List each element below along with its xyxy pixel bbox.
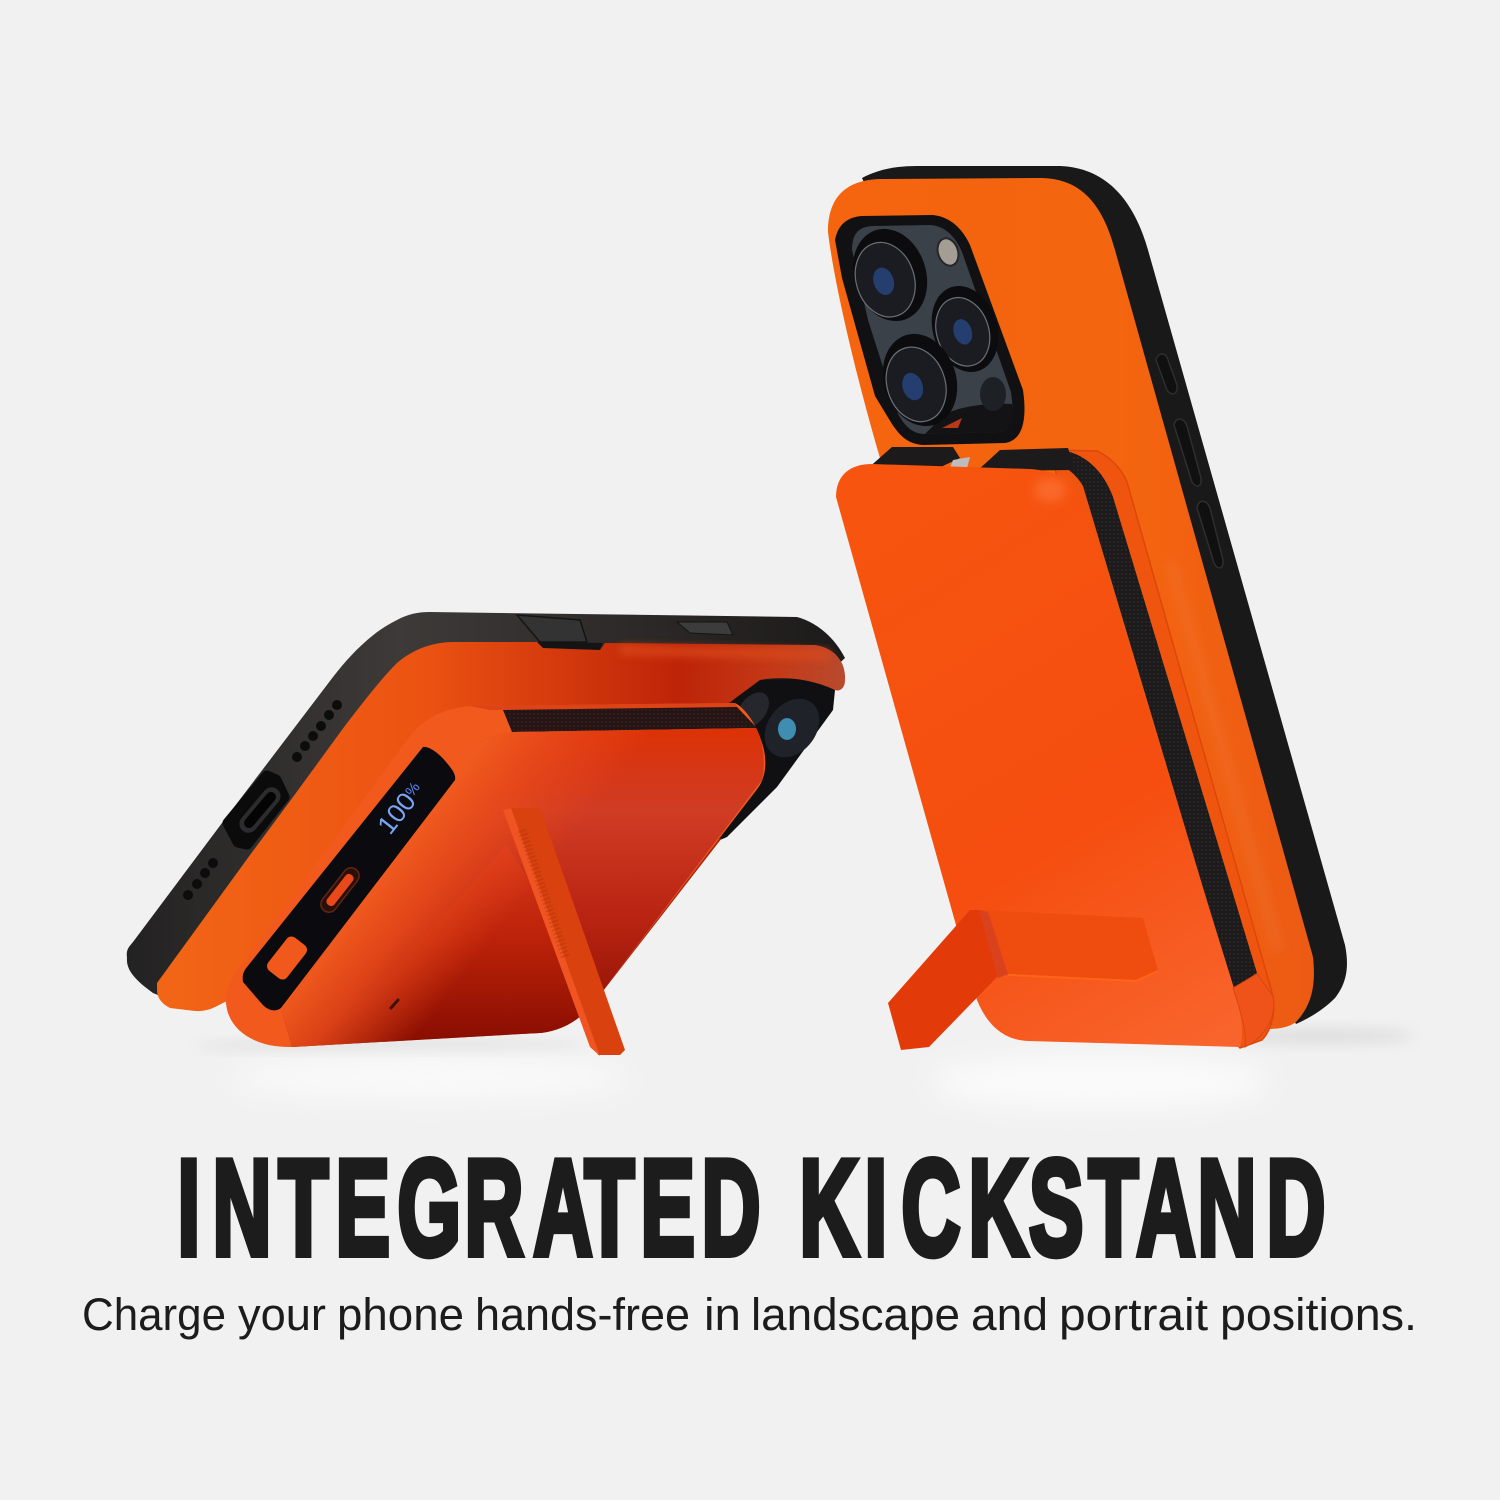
recess ledge — [1008, 971, 1158, 981]
title: INTEGRATED — [177, 1131, 760, 1284]
battery percentage readout: 100 — [371, 787, 422, 840]
subtitle: landscape — [751, 1289, 960, 1340]
side glow — [282, 728, 764, 1047]
flash — [934, 236, 962, 268]
phone black bumper — [127, 612, 845, 1000]
phone top edge sheen — [620, 650, 830, 655]
subtitle: hands-free — [475, 1289, 690, 1340]
title: KICKSTAND — [799, 1131, 1325, 1284]
kickstand recess — [980, 910, 1158, 980]
power button — [265, 934, 309, 982]
title — [177, 1131, 1325, 1284]
subtitle: in — [704, 1289, 741, 1340]
recess shading — [351, 845, 592, 1040]
front corner highlight — [1034, 478, 1066, 502]
shell top strip — [470, 703, 738, 710]
power bank shell — [226, 703, 765, 1047]
phone camera module — [700, 678, 835, 843]
product: portrait phone on kickstand — [828, 166, 1347, 1050]
subtitle: phone — [337, 1289, 464, 1340]
status slot — [391, 1000, 398, 1008]
usb-c port — [318, 865, 362, 915]
phone side highlight — [1170, 560, 1278, 950]
subtitle: portrait — [1059, 1289, 1209, 1340]
product: landscape phone on kickstand — [127, 612, 845, 1056]
battery percentage readout: % — [402, 779, 424, 800]
kickstand — [888, 910, 1008, 1050]
fabric band — [1045, 452, 1257, 988]
subtitle: and — [971, 1289, 1048, 1340]
port bezel — [228, 776, 284, 844]
subtitle: positions. — [1220, 1289, 1417, 1340]
floor shadows and reflections — [195, 1028, 1415, 1108]
power bank face — [282, 728, 764, 1047]
power bank end cap — [1233, 974, 1274, 1047]
lens right — [921, 277, 1009, 381]
subtitle: your — [238, 1289, 326, 1340]
phone underside sliver — [590, 838, 722, 995]
phone top buttons — [517, 615, 733, 650]
phone orange back — [157, 642, 845, 1011]
power bank clips — [866, 447, 1075, 472]
phone side buttons — [1156, 354, 1223, 568]
power bank front — [836, 464, 1242, 1047]
subtitle — [82, 1289, 1417, 1340]
lens bottom — [871, 324, 969, 436]
lens top — [841, 219, 939, 331]
subtitle: Charge — [82, 1289, 226, 1340]
camera module — [835, 215, 1024, 445]
display panel — [243, 747, 455, 1010]
phone orange back — [828, 178, 1314, 1029]
kickstand — [503, 808, 625, 1056]
power bank rim — [1050, 450, 1274, 1048]
fabric band — [503, 707, 757, 732]
phone black bumper — [862, 166, 1347, 1024]
speaker holes — [183, 700, 342, 900]
